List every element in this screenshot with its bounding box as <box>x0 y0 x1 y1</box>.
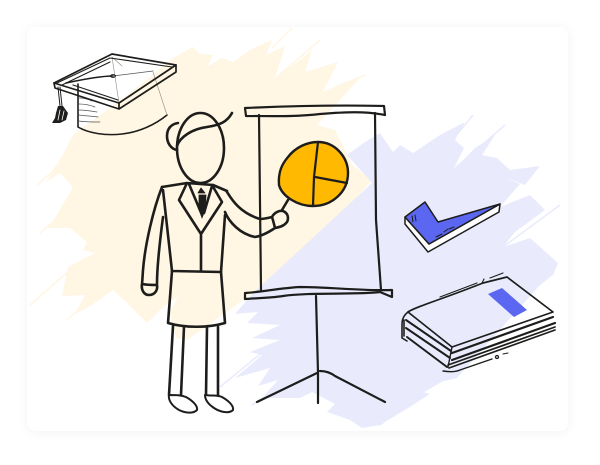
tassel <box>58 87 62 106</box>
mortarboard <box>54 54 176 103</box>
pie chart <box>279 142 348 206</box>
brush stroke: cream <box>30 28 372 340</box>
skirt <box>168 271 225 327</box>
flipchart stand <box>257 296 385 403</box>
hair bun and swoop <box>167 113 232 150</box>
head <box>177 113 224 183</box>
pointing arm and hand <box>225 192 288 237</box>
flipchart bottom bar <box>245 287 392 299</box>
icon: book <box>402 273 555 372</box>
icon: check mark <box>405 202 500 252</box>
tie <box>198 188 206 218</box>
icon: graduation cap <box>52 54 176 135</box>
pointer handle <box>282 200 288 210</box>
shoes <box>169 395 197 413</box>
jacket and lapels <box>162 183 227 272</box>
cap base <box>78 84 167 135</box>
flipchart <box>245 106 392 403</box>
panel: white card <box>27 27 568 432</box>
legs <box>169 326 218 395</box>
book cover <box>408 277 553 347</box>
flipchart board sides <box>259 113 381 290</box>
brush stroke: lavender <box>220 115 560 428</box>
left arm and cuff <box>142 187 163 295</box>
book label <box>488 288 527 317</box>
flipchart top bar <box>245 106 385 116</box>
presenter figure <box>142 113 288 413</box>
